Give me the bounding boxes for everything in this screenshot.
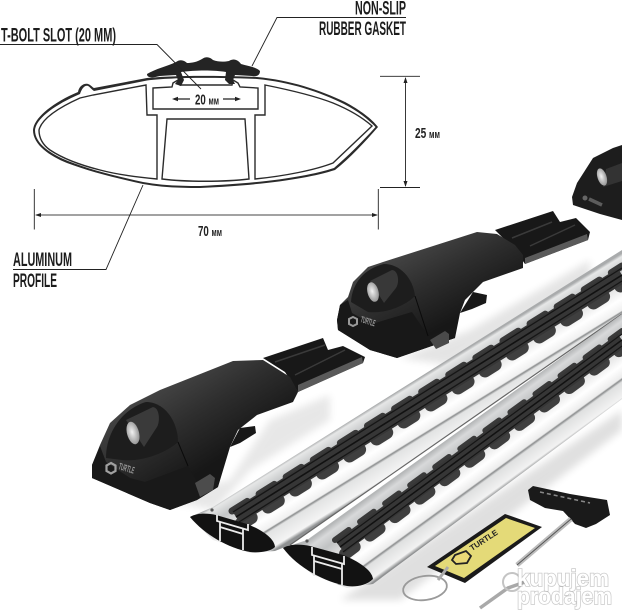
mount: front (92, 338, 365, 510)
watermark: kupujem (517, 565, 609, 591)
crossbar 2 (283, 314, 622, 600)
watermark: prodajem (517, 583, 612, 609)
inner walls (312, 547, 344, 585)
callout: aluminum profile: PROFILE (13, 270, 57, 292)
lock dome (106, 402, 178, 460)
dimension: height 25 mm: 25 мм (415, 125, 440, 142)
arrow left (172, 97, 190, 101)
profile outer shell (33, 76, 378, 188)
end face (190, 514, 275, 552)
bar surface (283, 314, 622, 588)
shaft (517, 519, 571, 565)
foot (337, 300, 455, 358)
mount: middle: TURTLE (359, 314, 377, 328)
hex wrench tool (480, 486, 610, 608)
fob wordmark: TURTLE (468, 528, 500, 553)
logo: hexagon (106, 463, 116, 474)
label 20 mm: 20 мм (195, 92, 219, 108)
end dot (305, 539, 309, 543)
rubber gasket (147, 57, 260, 86)
end dot (210, 508, 214, 512)
lock cylinder (370, 270, 398, 303)
key fob (402, 514, 542, 603)
dimension: height 25 mm (380, 76, 440, 188)
profile diagram: aluminum cross-section (33, 76, 378, 188)
body (337, 232, 523, 358)
logo: hexagon (349, 317, 357, 326)
inner walls (217, 515, 248, 550)
clamp lever (230, 426, 256, 447)
seam (415, 296, 428, 336)
center chamber (162, 119, 249, 181)
shadow (400, 260, 590, 365)
callout: non-slip rubber gasket (252, 0, 406, 66)
bracket detail (195, 474, 215, 497)
mount: front: TURTLE (117, 461, 136, 477)
callout: t-bolt slot (0, 24, 201, 89)
fob logo (452, 551, 471, 564)
sliding rails (495, 211, 590, 264)
lock dome (351, 264, 415, 312)
callout: t-bolt slot: T-BOLT SLOT (20 MM) (1, 24, 116, 46)
callout: aluminum profile: ALUMINUM (13, 249, 72, 271)
arrow right (223, 97, 241, 101)
lower edge (290, 314, 622, 545)
rubber gasket (232, 266, 622, 524)
right chamber (255, 85, 372, 179)
crossbar 1 (190, 250, 622, 553)
foot (92, 446, 218, 510)
seam (178, 442, 188, 466)
sliding rails (263, 338, 365, 392)
watermark (517, 565, 612, 609)
lock cylinder (126, 407, 159, 447)
end face (283, 545, 373, 586)
bracket detail (430, 331, 449, 349)
dimension: width 70 mm (34, 189, 378, 240)
callout: non-slip rubber gasket: RUBBER GASKET (319, 18, 406, 40)
mount: middle (337, 211, 590, 365)
t-slot (153, 80, 258, 109)
body (92, 360, 298, 510)
key (480, 582, 525, 608)
slot width dimension: 20 mm (172, 92, 241, 108)
dimension: width 70 mm: 70 мм (198, 223, 222, 240)
left chamber (39, 85, 157, 179)
key ring (402, 573, 448, 603)
callout: aluminum profile (13, 185, 143, 292)
rubber gasket (335, 331, 622, 554)
clamp lever (460, 292, 487, 313)
bar surface (190, 250, 622, 553)
mount: top right, partial (572, 145, 622, 220)
